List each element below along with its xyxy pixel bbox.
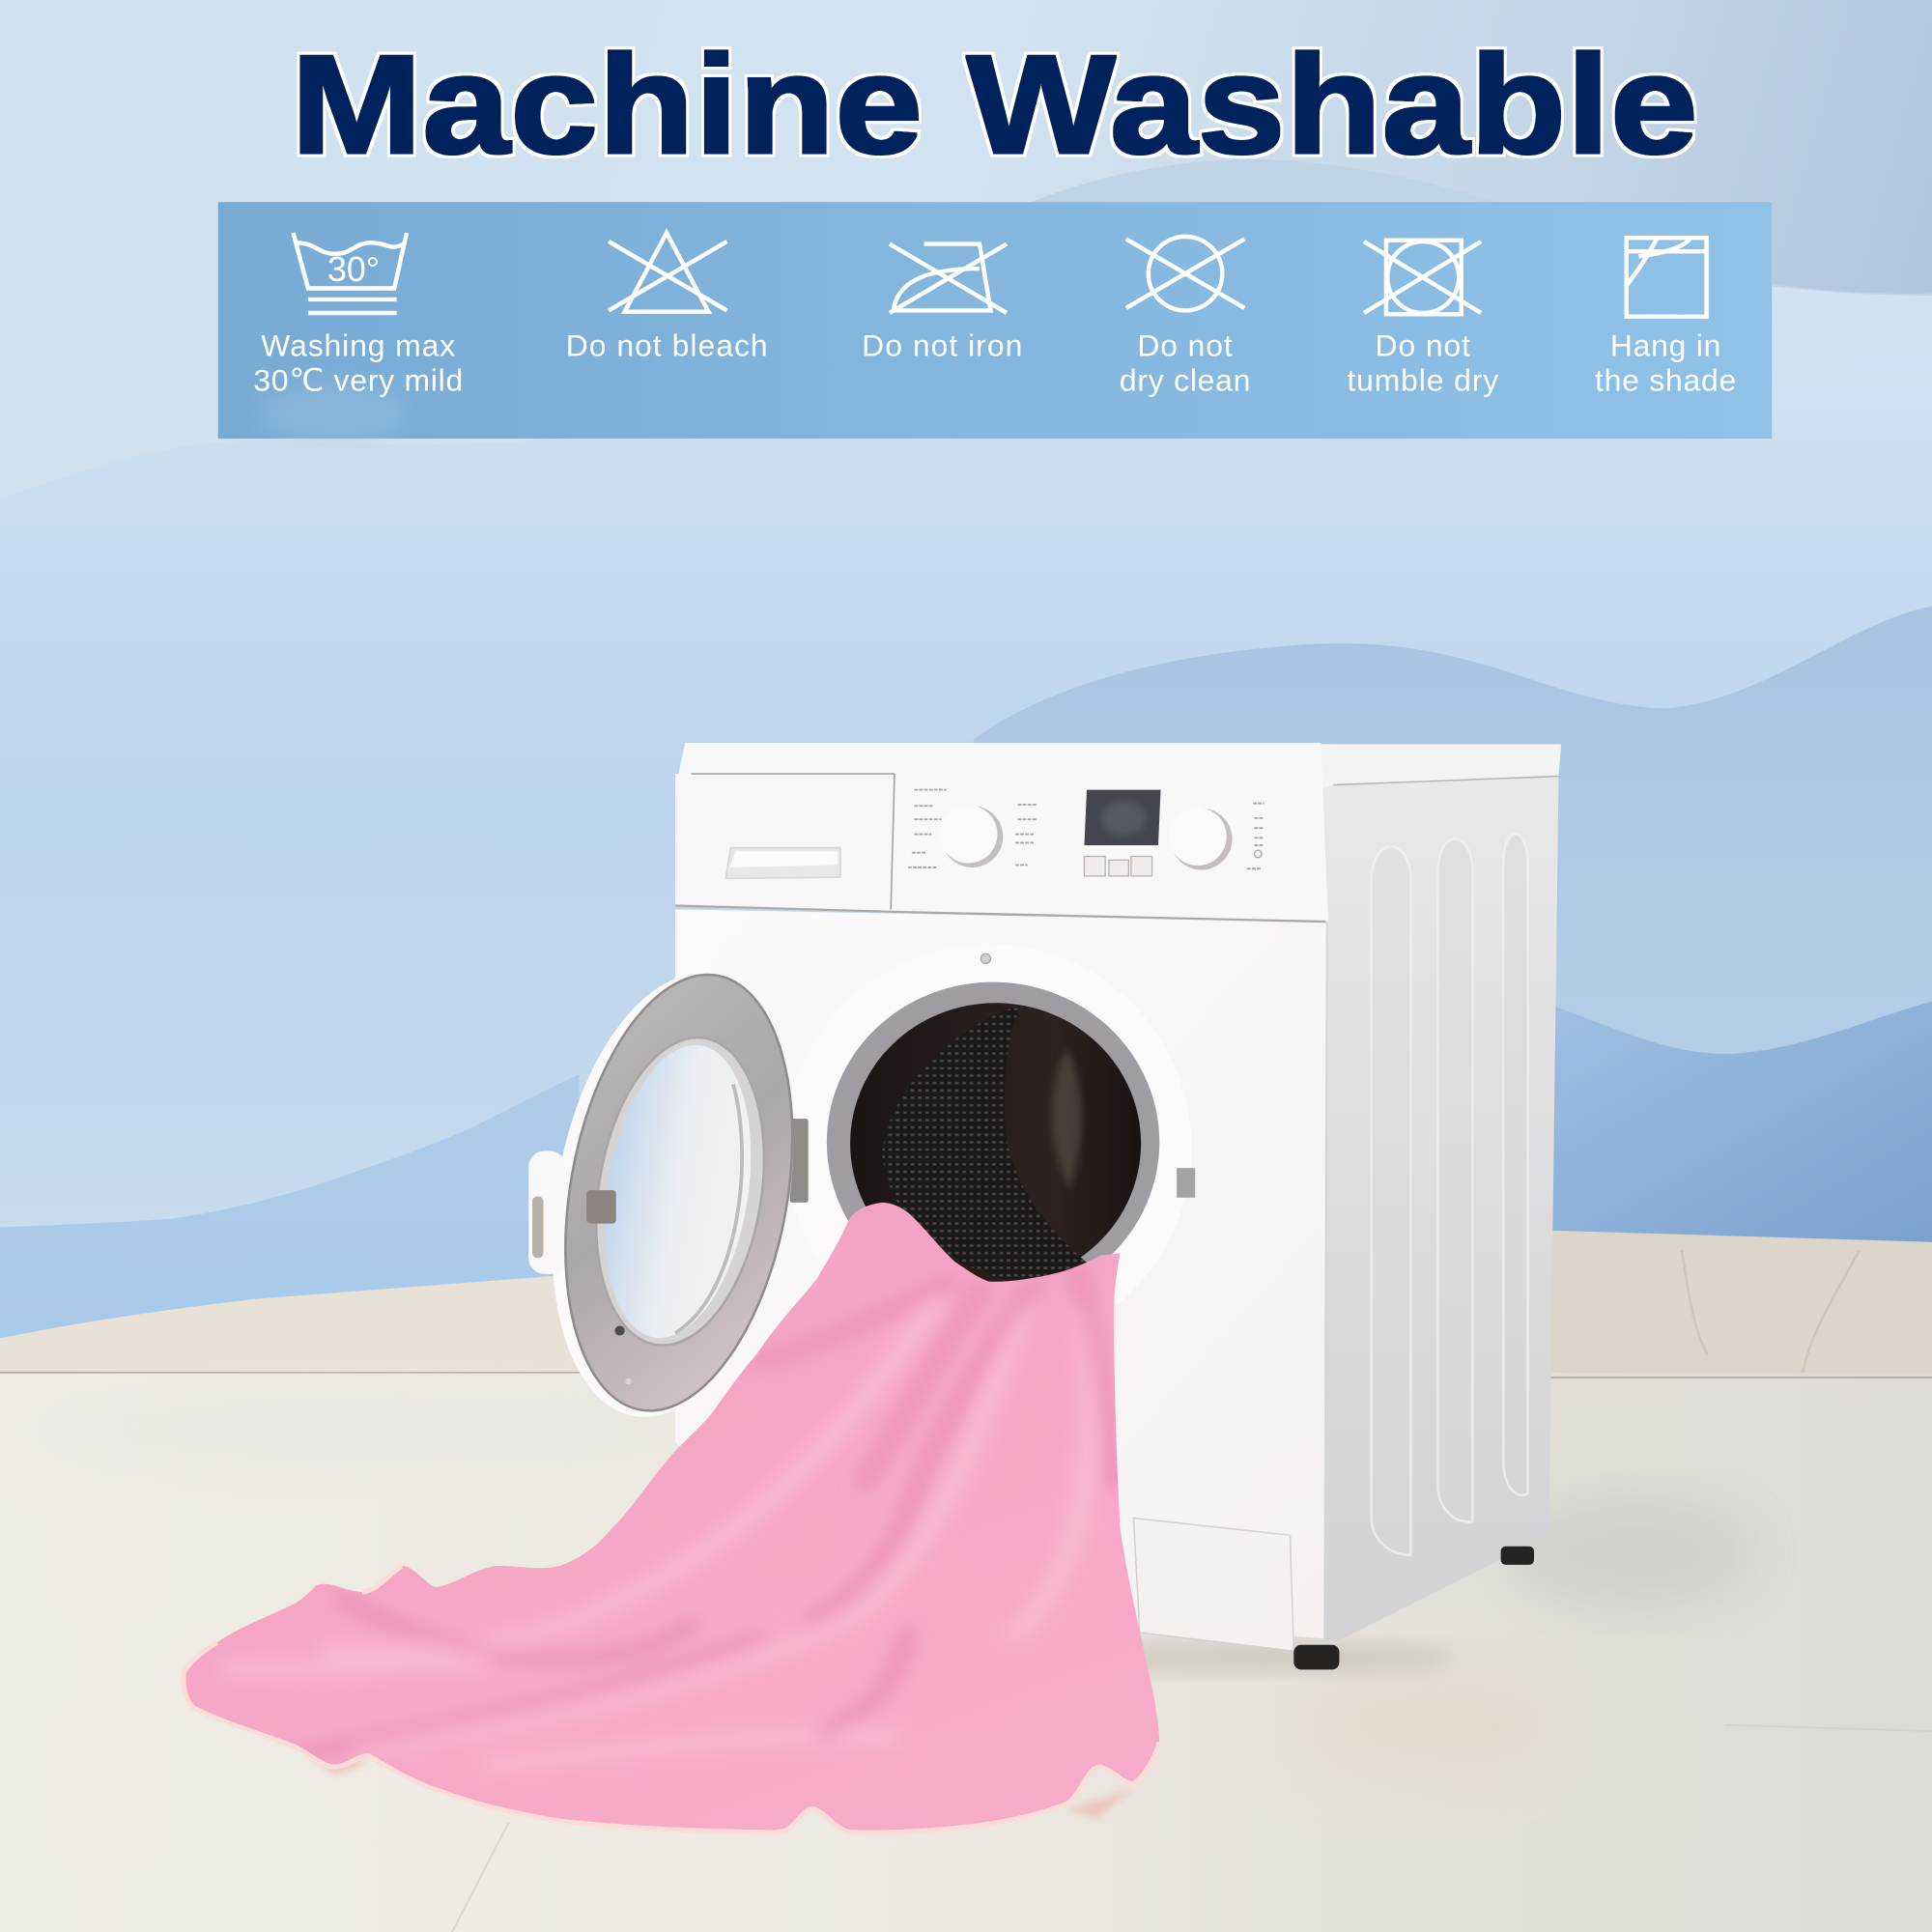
right knob bbox=[1169, 808, 1233, 870]
machine side panel bbox=[1321, 744, 1561, 1641]
caption: dry clean: dry clean bbox=[1120, 362, 1251, 397]
icon: do not iron bbox=[890, 244, 1007, 313]
panel buttons bbox=[1084, 856, 1152, 876]
drum interior bbox=[850, 1003, 1141, 1284]
machine front body bbox=[675, 909, 1327, 1638]
detergent drawer handle bbox=[725, 848, 840, 878]
door glass bbox=[585, 1035, 770, 1349]
icon: wash at 30 degrees bbox=[294, 233, 407, 313]
caption: do not tumble: Do not bbox=[1376, 328, 1471, 363]
blanket folds bbox=[230, 1266, 1114, 1765]
panel: care instructions band bbox=[218, 202, 1772, 443]
side ribs bbox=[1372, 834, 1528, 1555]
wall background bbox=[0, 0, 1932, 1392]
blanket pale hem bbox=[184, 1566, 1159, 1833]
icon: hang in the shade bbox=[1627, 238, 1707, 317]
caption: the shade: the shade bbox=[1595, 362, 1737, 397]
left knob bbox=[940, 806, 1003, 867]
icon: do not bleach bbox=[609, 233, 727, 312]
title: Machine Washable bbox=[291, 25, 1698, 183]
caption: 30C very mild: 30℃ very mild bbox=[253, 362, 464, 397]
machine feet bbox=[1293, 1547, 1534, 1669]
caption: do not: Do not bbox=[1137, 328, 1234, 363]
door hinge and latch bbox=[790, 1119, 1195, 1203]
caption: hang in: Hang in bbox=[1610, 328, 1721, 363]
caption: washing max: Washing max bbox=[261, 328, 456, 363]
door bezel bbox=[784, 944, 1191, 1350]
gasket bbox=[827, 982, 1159, 1302]
icon: do not dry clean bbox=[1126, 237, 1244, 310]
caption: tumble dry: tumble dry bbox=[1347, 362, 1499, 397]
icon: do not tumble dry bbox=[1364, 241, 1481, 314]
floor and baseboard bbox=[0, 1230, 1932, 1932]
washing machine bbox=[520, 743, 1561, 1669]
display bbox=[1084, 790, 1161, 845]
icon: wash at 30 degrees: 30° bbox=[327, 250, 380, 289]
control panel bbox=[675, 743, 1328, 922]
caption: do not bleach: Do not bleach bbox=[566, 328, 769, 363]
panel markings bbox=[908, 790, 1264, 868]
caption: do not iron: Do not iron bbox=[862, 328, 1023, 363]
machine top side edge bbox=[1321, 744, 1561, 788]
pink blanket bbox=[184, 1203, 1159, 1833]
open door bbox=[520, 954, 826, 1436]
